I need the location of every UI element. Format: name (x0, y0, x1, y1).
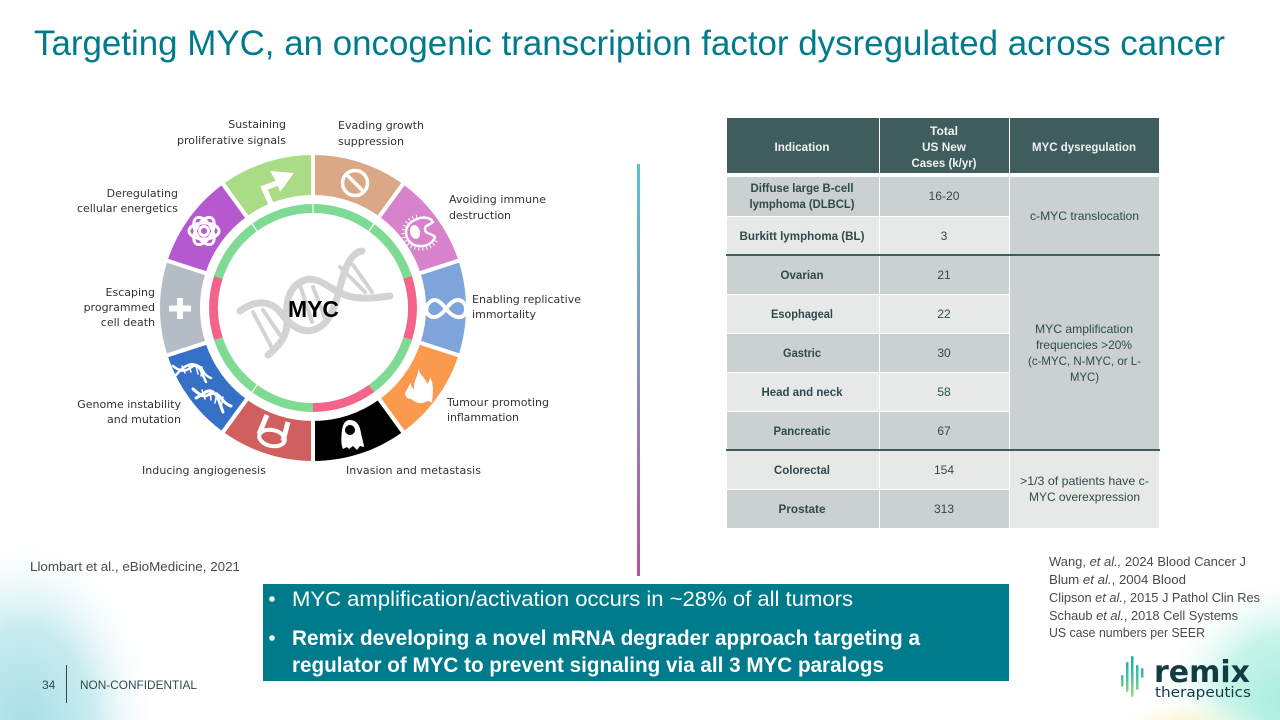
callout text: MYC amplification/activation occurs in ~28% of all tumors (292, 588, 853, 611)
segment: deregulating energetics (166, 183, 248, 274)
icon: arrow (264, 171, 294, 204)
label: genome instability and mutation (77, 398, 181, 426)
table: dysregulation column: MYC overexpression (1029, 490, 1140, 504)
icon: DNA helix (240, 251, 390, 355)
divider line (637, 164, 640, 576)
label: deregulating cellular energetics (77, 187, 178, 215)
table: dysregulation column (1020, 209, 1149, 504)
label: escaping programmed cell death: Escaping (106, 286, 155, 299)
label: enabling replicative immortality: immortality (472, 308, 536, 321)
table: cases column: 154 (934, 463, 954, 477)
segment: inducing angiogenesis (222, 398, 313, 463)
table header (727, 118, 1159, 173)
table (726, 118, 1160, 528)
label: tumour promoting inflammation (446, 396, 549, 424)
table: indication column (740, 183, 865, 516)
segment: enabling replicative immortality (419, 260, 468, 356)
segment: genome instability (166, 342, 248, 433)
logo: remix therapeutics: therapeutics (1155, 685, 1251, 701)
label: sustaining proliferative signals: proliferative signals (177, 134, 286, 147)
label: escaping programmed cell death (84, 286, 155, 329)
icon: no symbol (342, 170, 368, 196)
icon: mutated DNA strands (173, 364, 231, 412)
icon: immune cell (403, 216, 437, 249)
references: US case numbers per SEER (1049, 625, 1205, 640)
label: escaping programmed cell death: programmed (84, 301, 155, 314)
table: cases column: 58 (937, 385, 951, 399)
references: Clipson et al., 2015 J Pathol Clin Res (1049, 590, 1260, 605)
icon: flame (405, 368, 433, 403)
table: dysregulation column: frequencies >20% (1036, 338, 1132, 352)
label: avoiding immune destruction: destruction (449, 209, 511, 222)
table: cases column: 21 (937, 268, 951, 282)
table: dysregulation column: MYC amplification (1035, 322, 1133, 336)
icon: metastasis ghost (341, 420, 364, 450)
table: dysregulation column: c-MYC translocation (1030, 209, 1139, 223)
table: indication column: Ovarian (780, 270, 824, 282)
callout text: Remix developing a novel mRNA degrader approach targeting a (292, 627, 920, 650)
footer (42, 665, 197, 703)
label: evading growth suppression: Evading growth (338, 119, 424, 132)
references: Schaub et al., 2018 Cell Systems (1049, 608, 1238, 623)
callout text (292, 588, 920, 677)
segment: avoiding immune destruction (378, 183, 460, 274)
logo mark (1121, 656, 1144, 697)
icon: atom (189, 214, 219, 248)
table: indication column: Head and neck (762, 387, 843, 399)
table: indication column: Diffuse large B-cell (750, 183, 854, 195)
callout (263, 584, 1009, 681)
table header: Cases (k/yr) (912, 158, 977, 170)
references (1049, 554, 1260, 640)
table: indication column: Colorectal (774, 465, 830, 477)
segment: escaping cell death (158, 260, 207, 356)
title: Targeting MYC, an oncogenic transcription factor dysregulated across cancer (34, 24, 1225, 63)
segment: invasion and metastasis (313, 398, 404, 463)
table: indication column: Gastric (783, 348, 822, 360)
label: evading growth suppression: suppression (338, 135, 404, 148)
logo wordmark: remix (1154, 655, 1250, 690)
icon: blood vessel (258, 415, 288, 449)
wheel citation: Llombart et al., eBioMedicine, 2021 (30, 559, 240, 574)
icon: plus (169, 298, 191, 319)
table header: MYC dysregulation (1032, 142, 1136, 154)
label: tumour promoting inflammation: inflammation (447, 411, 519, 424)
footer: 34 (42, 678, 56, 692)
table: indication column: Pancreatic (774, 426, 831, 438)
segment: tumour promoting inflammation (378, 342, 460, 433)
table: indication column: lymphoma (DLBCL) (750, 199, 855, 211)
table: cases column: 67 (937, 424, 951, 438)
table row backgrounds (726, 177, 1160, 528)
label: enabling replicative immortality (472, 293, 581, 321)
icon: MYC label: MYC (288, 296, 339, 322)
table: indication column: Prostate (778, 504, 826, 516)
table header: Total (930, 126, 958, 138)
inner ring (214, 203, 412, 408)
table: cases column (928, 189, 960, 516)
table: dysregulation column: >1/3 of patients have c- (1020, 474, 1149, 488)
references: Blum et al., 2004 Blood (1049, 572, 1186, 587)
table: cases column: 16-20 (928, 189, 960, 203)
label: avoiding immune destruction (449, 193, 546, 222)
label: invasion and metastasis: Invasion and metastasis (346, 464, 481, 477)
label: enabling replicative immortality: Enabling replicative (472, 293, 581, 306)
label: tumour promoting inflammation: Tumour promoting (446, 396, 549, 409)
table: cases column: 22 (937, 307, 951, 321)
table header: Indication (774, 142, 830, 154)
table header: US New (922, 142, 966, 154)
label: sustaining proliferative signals: Sustaining (228, 118, 286, 131)
label: genome instability and mutation: and mutation (107, 413, 181, 426)
footer: NON-CONFIDENTIAL (80, 678, 197, 692)
hallmarks of cancer wheel (77, 118, 581, 477)
table: dysregulation column: (c-MYC, N-MYC, or L- (1028, 354, 1141, 368)
table: indication column: Esophageal (771, 309, 833, 321)
label: escaping programmed cell death: cell death (101, 316, 155, 329)
callout text: regulator of MYC to prevent signaling via all 3 MYC paralogs (292, 654, 884, 677)
icon: infinity (426, 300, 466, 317)
label: inducing angiogenesis: Inducing angiogenesis (142, 464, 266, 477)
table: cases column: 30 (937, 346, 951, 360)
table: cases column: 3 (941, 229, 948, 243)
label: avoiding immune destruction: Avoiding immune (449, 193, 546, 206)
label: genome instability and mutation: Genome instability (77, 398, 181, 411)
table: dysregulation column: MYC) (1070, 370, 1099, 384)
label: sustaining proliferative signals (177, 118, 286, 147)
segment: sustaining proliferative signals (222, 153, 313, 218)
label: deregulating cellular energetics: Deregulating (107, 187, 178, 200)
label: evading growth suppression (338, 119, 424, 148)
references: Wang, et al., 2024 Blood Cancer J (1049, 554, 1246, 569)
table: cases column: 313 (934, 502, 954, 516)
label: deregulating cellular energetics: cellular energetics (77, 202, 178, 215)
callout bullets (269, 596, 275, 641)
logo: remix therapeutics (1121, 655, 1251, 701)
table: indication column: Burkitt lymphoma (BL) (740, 231, 865, 243)
segment: evading growth suppression (313, 153, 404, 218)
